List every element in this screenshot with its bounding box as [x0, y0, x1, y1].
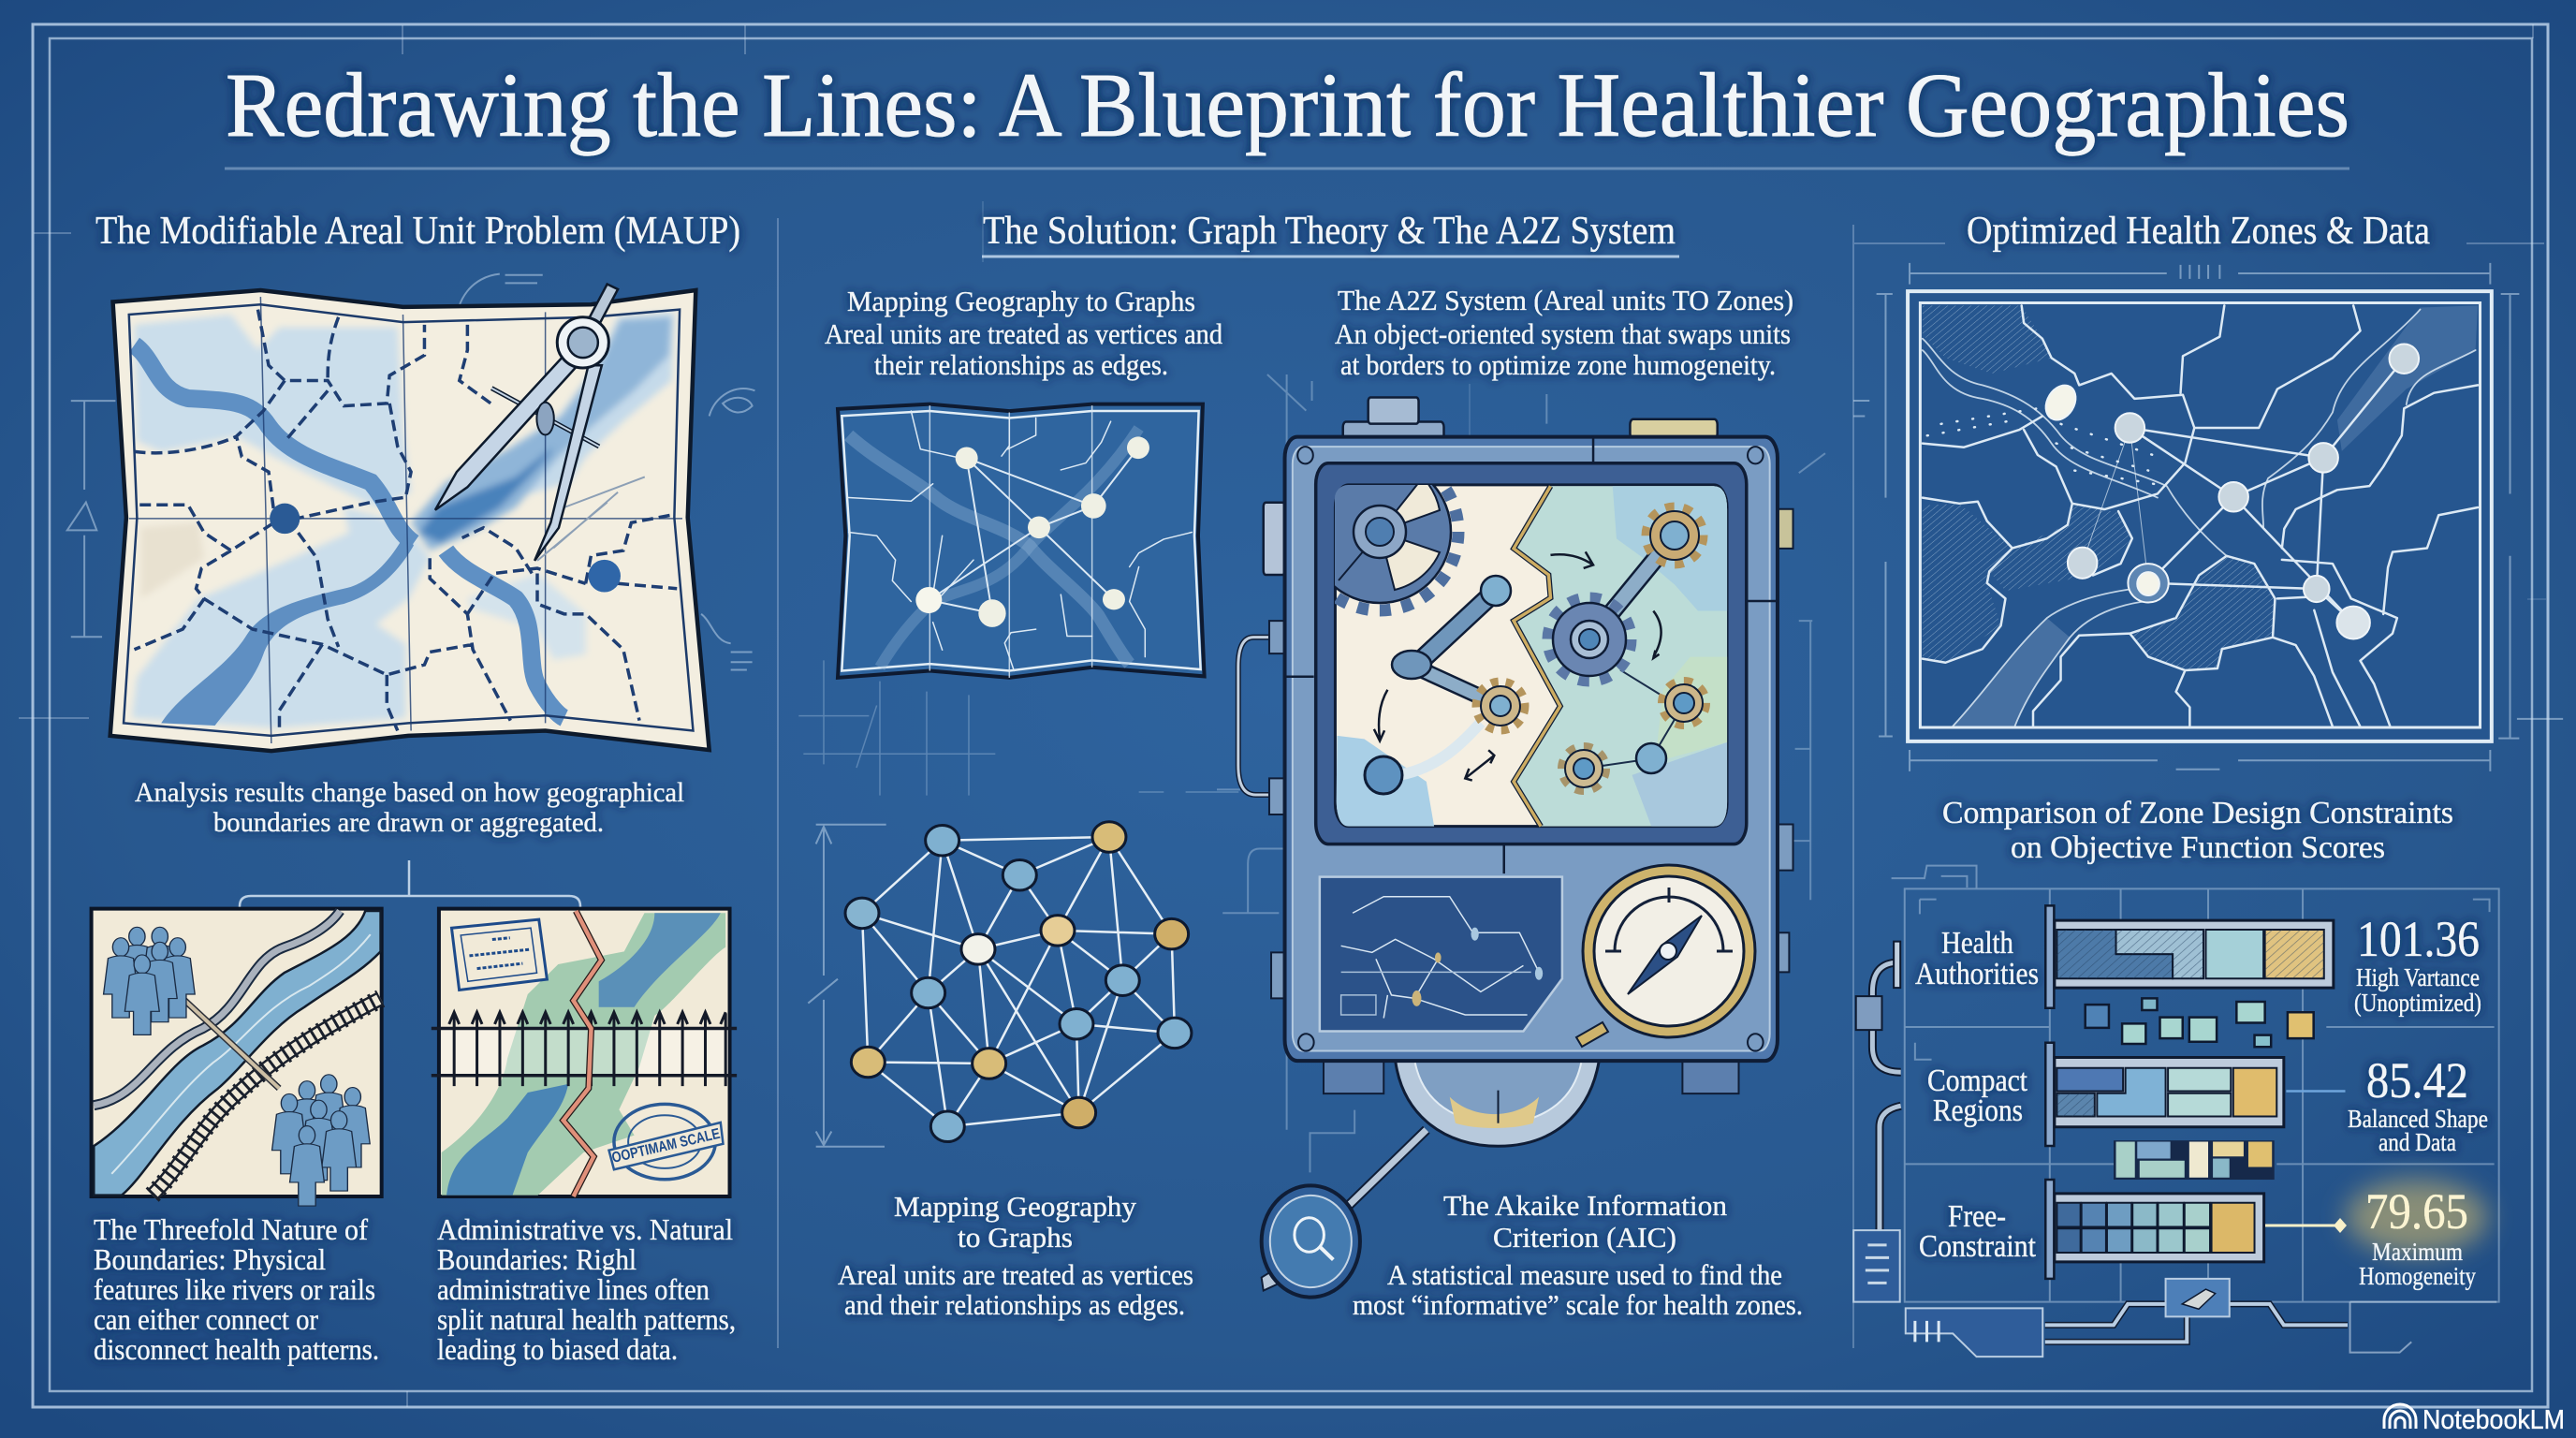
bar: free-constraint [2045, 1180, 2264, 1279]
score: compact regions: 85.42 [2366, 1052, 2468, 1108]
illustration: map to graph overlay [838, 404, 1205, 678]
illustration: network graph [808, 822, 1192, 1147]
row labels: Compact [1927, 1064, 2027, 1098]
text: mapping geography to graphs: their relationships as edges. [874, 348, 1168, 381]
text: mapping geography to graphs: Areal units are treated as vertices and [825, 317, 1222, 350]
caption: MAUP: Analysis results change based on how geographical [135, 777, 684, 808]
text: mapping geography to graphs (lower) [838, 1190, 1193, 1321]
text: threefold nature of boundaries: features like rivers or rails [94, 1272, 375, 1306]
row labels: Regions [1933, 1093, 2023, 1128]
text: Akaike information criterion [1353, 1189, 1803, 1321]
heading: solution: The Solution: Graph Theory & The A2Z System [983, 210, 1676, 253]
score: free-constraint: 79.65 [2365, 1183, 2468, 1240]
heading: chart: on Objective Function Scores [2011, 830, 2385, 865]
score: health authorities: 101.36 [2357, 911, 2480, 967]
heading: chart [1942, 796, 2453, 865]
title rule [225, 167, 2349, 170]
machinery pipes [1853, 942, 2496, 1357]
score: health authorities: (Unoptimized) [2354, 989, 2481, 1017]
bar: health authorities [2045, 905, 2334, 1008]
panel: solution column [798, 210, 1825, 1321]
row labels: Health [1941, 926, 2013, 961]
score: health authorities: High Vartance [2356, 963, 2480, 991]
text: mapping geography to graphs (lower): Areal units are treated as vertices [838, 1258, 1193, 1291]
heading: chart: Comparison of Zone Design Constraints [1942, 796, 2453, 830]
NotebookLM badge: NotebookLM [2422, 1405, 2565, 1435]
connector: best score [2265, 1218, 2347, 1233]
illustration: optimized zone map [1853, 263, 2563, 771]
heading underline [982, 255, 1679, 258]
gauge and gears [1335, 485, 1756, 1049]
text: mapping geography to graphs (lower): and their relationships as edges. [844, 1288, 1185, 1321]
heading: MAUP: The Modifiable Areal Unit Problem (MAUP) [95, 210, 740, 253]
panel: administrative vs natural illustration [432, 909, 737, 1196]
score: health authorities [2354, 911, 2481, 1017]
text: threefold nature of boundaries: The Threefold Nature of [94, 1212, 368, 1246]
illustration: A2Z machine [1217, 374, 1825, 1298]
text: threefold nature of boundaries: disconnect health patterns. [94, 1332, 379, 1366]
score: compact regions: and Data [2378, 1128, 2456, 1156]
text: administrative vs natural boundaries: Boundaries: Righl [437, 1242, 637, 1276]
text: mapping geography to graphs (lower): Mapping Geography [894, 1190, 1136, 1223]
score: compact regions [2348, 1052, 2488, 1156]
score: compact regions: Balanced Shape [2348, 1105, 2488, 1133]
text: A2Z system: at borders to optimize zone humogeneity. [1340, 348, 1776, 381]
text: A2Z system: The A2Z System (Areal units TO Zones) [1338, 284, 1793, 316]
glow behind best score [2346, 1180, 2488, 1255]
illustration: folded map with compass [67, 274, 754, 751]
machine body [1217, 374, 1825, 1298]
row labels: Free- [1948, 1199, 2006, 1234]
caption: MAUP: boundaries are drawn or aggregated. [213, 807, 604, 838]
text: Akaike information criterion: Criterion (AIC) [1493, 1221, 1676, 1254]
loose zone fragments [2086, 998, 2314, 1047]
text: mapping geography to graphs (lower): to Graphs [958, 1221, 1073, 1254]
chart: zone design constraint bars [1853, 866, 2499, 1357]
score: free-constraint: Homogeneity [2359, 1262, 2476, 1290]
score: free-constraint [2359, 1183, 2476, 1290]
panel: boundary nature illustration [92, 909, 382, 1206]
text: Akaike information criterion: most “informative” scale for health zones. [1353, 1288, 1803, 1321]
text: threefold nature of boundaries: Boundaries: Physical [94, 1242, 326, 1276]
stamp text: OOPTIMAM SCALE [610, 1126, 722, 1167]
panel: MAUP column [67, 210, 754, 1366]
text: administrative vs natural boundaries: split natural health patterns, [437, 1302, 736, 1336]
text: administrative vs natural boundaries: Administrative vs. Natural [437, 1212, 733, 1246]
bar: compact regions [2045, 1043, 2346, 1180]
text: mapping geography to graphs: Mapping Geography to Graphs [847, 285, 1195, 317]
text: A2Z system [1335, 284, 1793, 381]
panel: optimized health zones [1853, 210, 2563, 1357]
text: administrative vs natural boundaries [437, 1212, 736, 1366]
heading: optimized zones: Optimized Health Zones & Data [1967, 210, 2430, 253]
text: Akaike information criterion: A statistical measure used to find the [1387, 1258, 1782, 1291]
text: threefold nature of boundaries: can either connect or [94, 1302, 318, 1336]
caption: MAUP [135, 777, 684, 838]
text: threefold nature of boundaries [94, 1212, 379, 1366]
bracket connector [240, 860, 580, 928]
title: Redrawing the Lines: A Blueprint for Healthier Geographies [226, 55, 2349, 155]
construction sketch lines [798, 660, 1238, 796]
row labels: Constraint [1919, 1229, 2036, 1264]
text: Akaike information criterion: The Akaike Information [1443, 1189, 1727, 1222]
row labels: Authorities [1915, 957, 2039, 991]
text: A2Z system: An object-oriented system that swaps units [1335, 317, 1791, 350]
text: administrative vs natural boundaries: administrative lines often [437, 1272, 710, 1306]
text: administrative vs natural boundaries: leading to biased data. [437, 1332, 678, 1366]
score: free-constraint: Maximum [2372, 1238, 2463, 1266]
text: mapping geography to graphs [825, 285, 1222, 381]
row labels [1915, 926, 2039, 1264]
